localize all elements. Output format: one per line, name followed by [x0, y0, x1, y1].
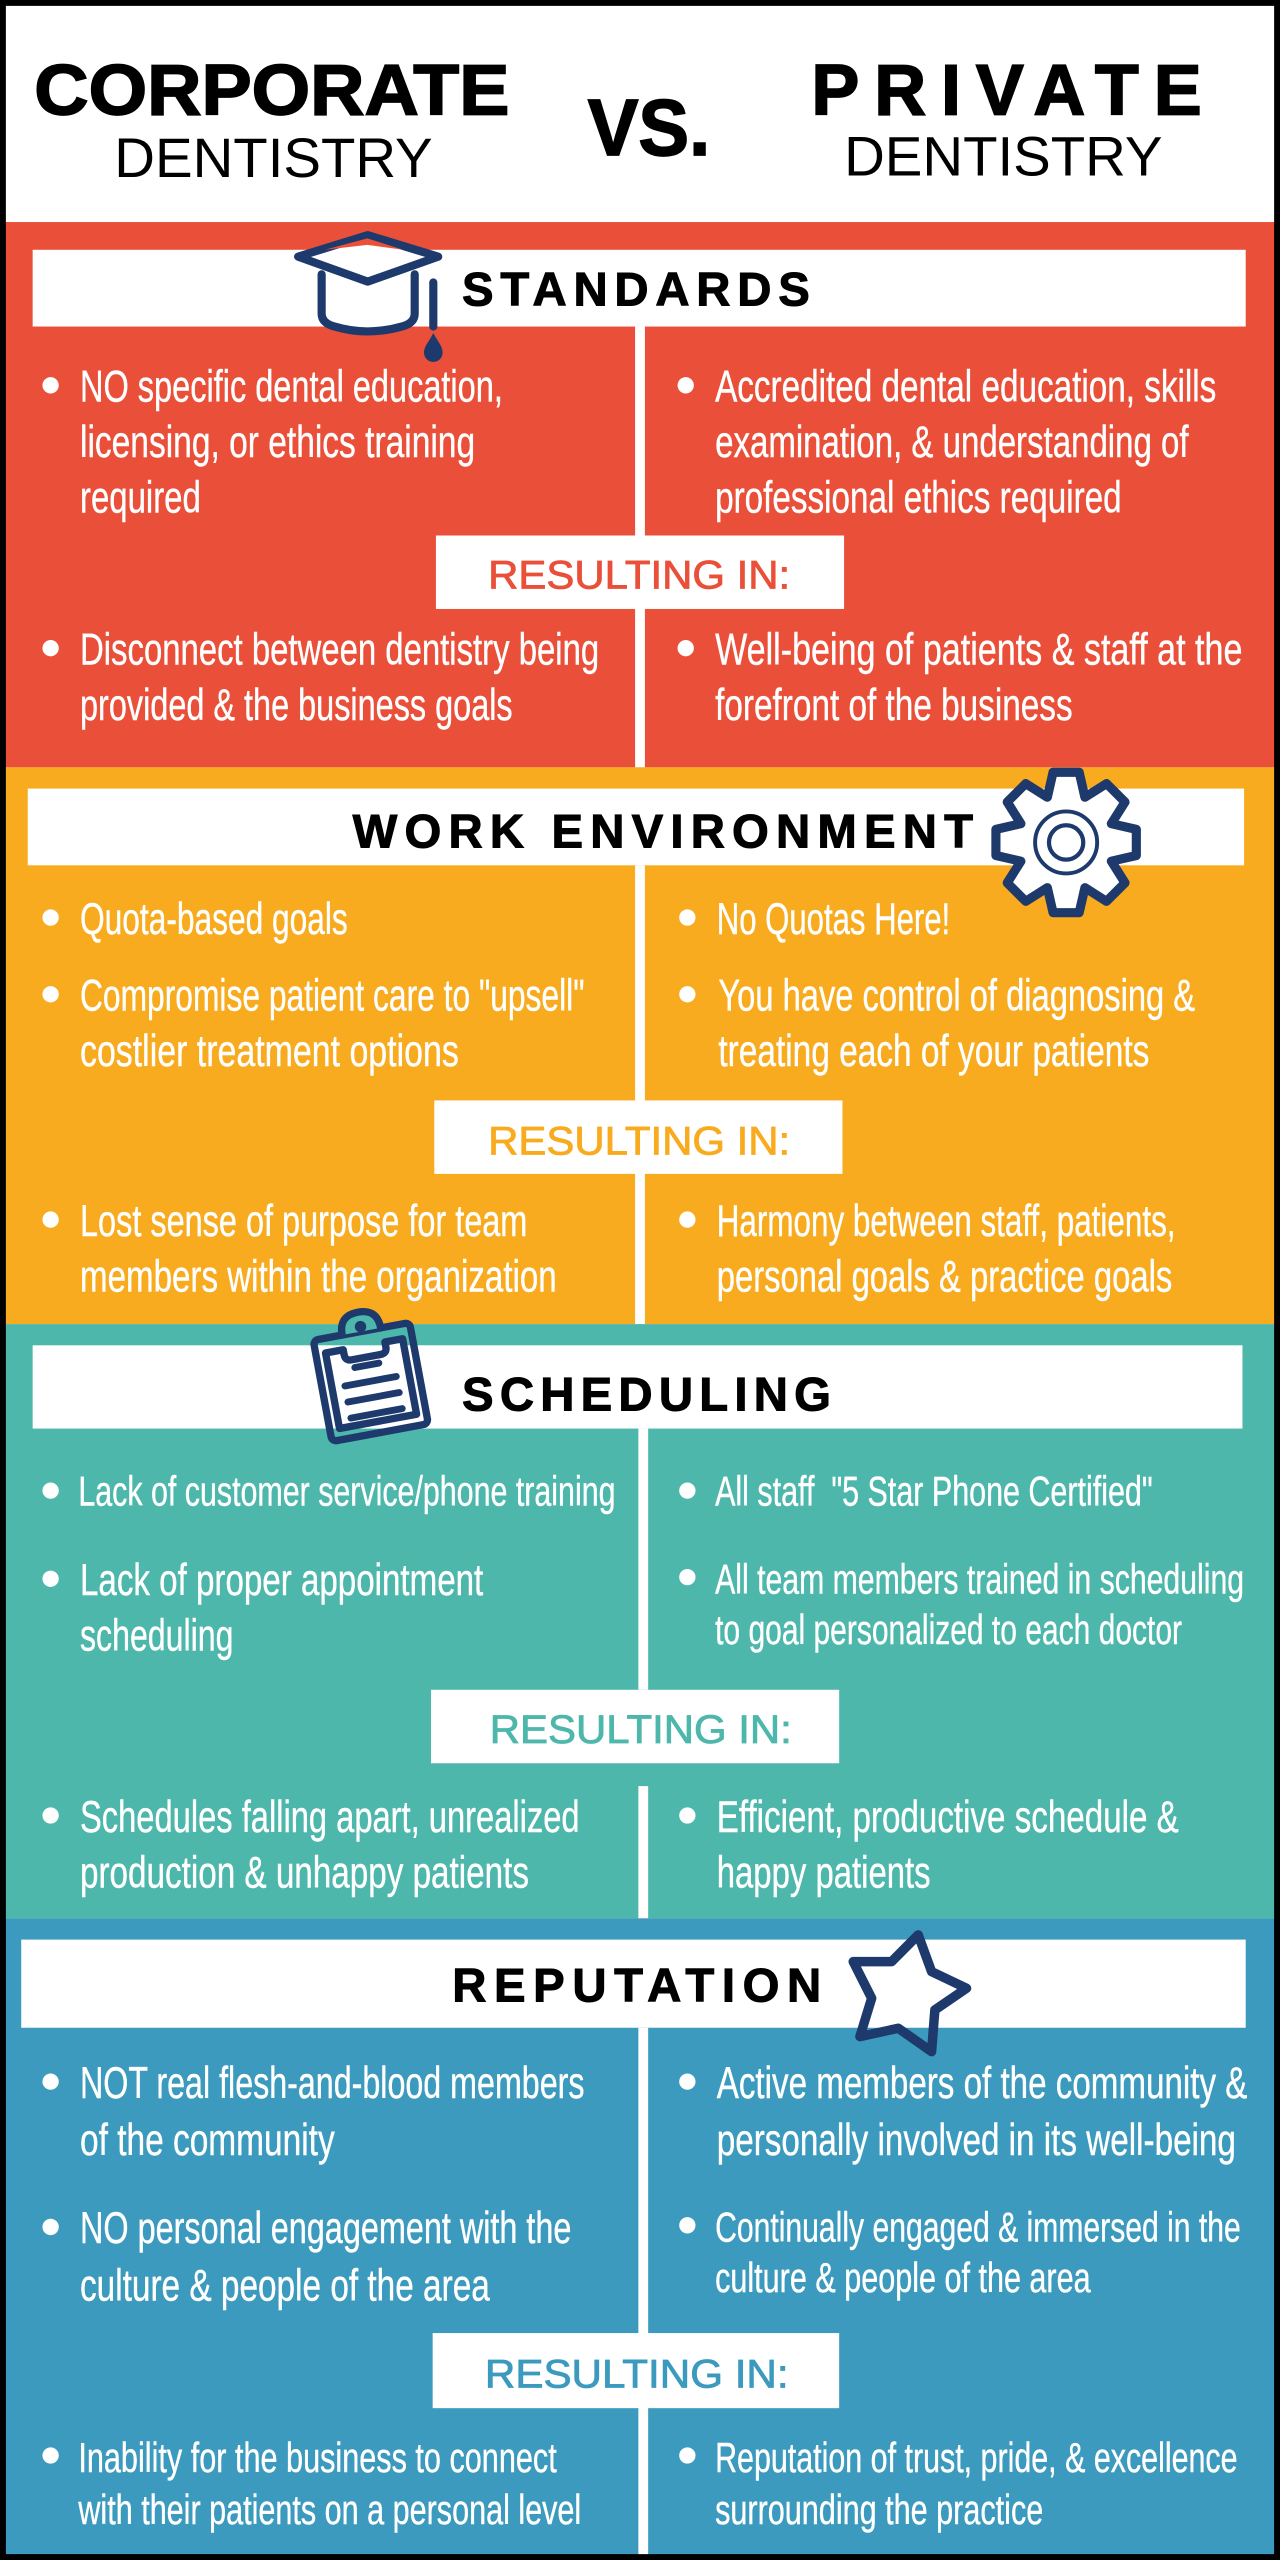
- icon: clipboard: [310, 1303, 428, 1442]
- label: resulting in: RESULTING IN:: [488, 554, 790, 598]
- label: resulting in: [433, 2333, 839, 2408]
- header: [34, 50, 1202, 189]
- panel: scheduling: [5, 1303, 1275, 1918]
- heading bar: standards: STANDARDS: [462, 263, 810, 316]
- text: work corporate: [42, 893, 584, 1076]
- text: work corporate: Quota-based goals: [80, 893, 348, 944]
- text: reputation corporate result: Inability for the business to connect: [78, 2434, 557, 2481]
- divider: standards: [635, 327, 645, 767]
- text: standards corporate: [42, 361, 503, 523]
- text: standards private: professional ethics required: [715, 472, 1122, 523]
- divider: work environment: [635, 865, 645, 1324]
- label: resulting in: RESULTING IN:: [488, 1119, 790, 1163]
- text: work private result: [679, 1195, 1176, 1301]
- label: resulting in: RESULTING IN:: [485, 2353, 789, 2397]
- panel: reputation: [5, 1918, 1275, 2555]
- text: scheduling corporate: Lack of proper appointment: [80, 1554, 484, 1605]
- heading bar: scheduling: [33, 1345, 1242, 1429]
- title: private dentistry: [811, 50, 1202, 188]
- text: work corporate result: members within the organization: [80, 1250, 557, 1301]
- title: corporate dentistry: [34, 50, 509, 189]
- text: scheduling corporate result: Schedules falling apart, unrealized: [80, 1791, 580, 1842]
- text: reputation private result: surrounding the practice: [715, 2486, 1043, 2533]
- heading bar: scheduling: SCHEDULING: [462, 1369, 831, 1422]
- title: vs: VS.: [588, 83, 710, 172]
- heading bar: work environment: [28, 789, 1244, 865]
- text: reputation corporate: NOT real flesh-and-blood members: [80, 2057, 584, 2108]
- label: resulting in: [431, 1690, 839, 1763]
- text: standards corporate result: [42, 623, 599, 730]
- label: resulting in: RESULTING IN:: [490, 1708, 792, 1752]
- text: work corporate: costlier treatment options: [80, 1025, 459, 1076]
- text: scheduling corporate: scheduling: [80, 1610, 233, 1661]
- text: reputation corporate: NO personal engagement with the: [80, 2202, 571, 2253]
- label: resulting in: [434, 1100, 842, 1174]
- text: work private: treating each of your patients: [718, 1025, 1149, 1076]
- heading bar: standards: [33, 250, 1246, 327]
- text: reputation private: [679, 2057, 1247, 2301]
- text: scheduling private result: happy patients: [717, 1846, 931, 1897]
- text: standards private: [678, 361, 1216, 523]
- text: scheduling corporate: [42, 1467, 616, 1661]
- heading bar: reputation: REPUTATION: [452, 1960, 821, 2013]
- text: reputation private: culture & people of the area: [715, 2254, 1091, 2301]
- divider: scheduling upper: [638, 1429, 648, 1690]
- divider: reputation: [638, 2028, 648, 2555]
- text: reputation corporate: culture & people of the area: [80, 2259, 490, 2310]
- icon: star: [853, 1935, 967, 2052]
- text: standards private result: forefront of the business: [715, 679, 1073, 730]
- text: reputation corporate result: with their patients on a personal level: [78, 2486, 581, 2533]
- title: private dentistry: DENTISTRY: [844, 126, 1162, 188]
- text: standards corporate: required: [80, 472, 201, 523]
- text: reputation corporate: [42, 2057, 584, 2310]
- text: reputation corporate: of the community: [80, 2114, 335, 2165]
- text: reputation corporate result: [42, 2434, 581, 2533]
- divider: scheduling lower: [638, 1786, 648, 1918]
- text: work corporate result: [42, 1195, 557, 1301]
- text: scheduling corporate result: [42, 1791, 580, 1897]
- text: scheduling private result: [679, 1791, 1179, 1897]
- title: corporate dentistry: DENTISTRY: [114, 127, 433, 189]
- text: reputation private result: [679, 2434, 1238, 2533]
- text: standards corporate: NO specific dental education,: [80, 361, 503, 412]
- text: standards private result: [678, 623, 1242, 730]
- panel: standards: [5, 222, 1275, 767]
- heading bar: work environment: WORK ENVIRONMENT: [353, 805, 973, 858]
- heading bar: reputation: [21, 1940, 1246, 2028]
- text: scheduling corporate: Lack of customer service/phone training: [78, 1467, 616, 1514]
- title: private dentistry: PRIVATE: [811, 50, 1202, 130]
- text: standards corporate result: provided & the business goals: [80, 679, 513, 730]
- title: corporate dentistry: CORPORATE: [34, 50, 509, 130]
- panel: work environment: [5, 767, 1275, 1324]
- text: scheduling corporate result: production & unhappy patients: [80, 1846, 529, 1897]
- label: resulting in: [436, 536, 844, 609]
- text: standards corporate: licensing, or ethics training: [80, 416, 475, 467]
- icon: graduation cap: [298, 235, 443, 362]
- icon: gear: [996, 772, 1136, 913]
- text: work corporate: Compromise patient care to "upsell": [80, 970, 584, 1021]
- text: work private: [679, 893, 1195, 1076]
- text: work private: No Quotas Here!: [717, 893, 950, 944]
- text: work corporate result: Lost sense of purpose for team: [80, 1195, 527, 1246]
- text: scheduling private: [679, 1467, 1244, 1653]
- text: standards corporate result: Disconnect between dentistry being: [80, 623, 599, 674]
